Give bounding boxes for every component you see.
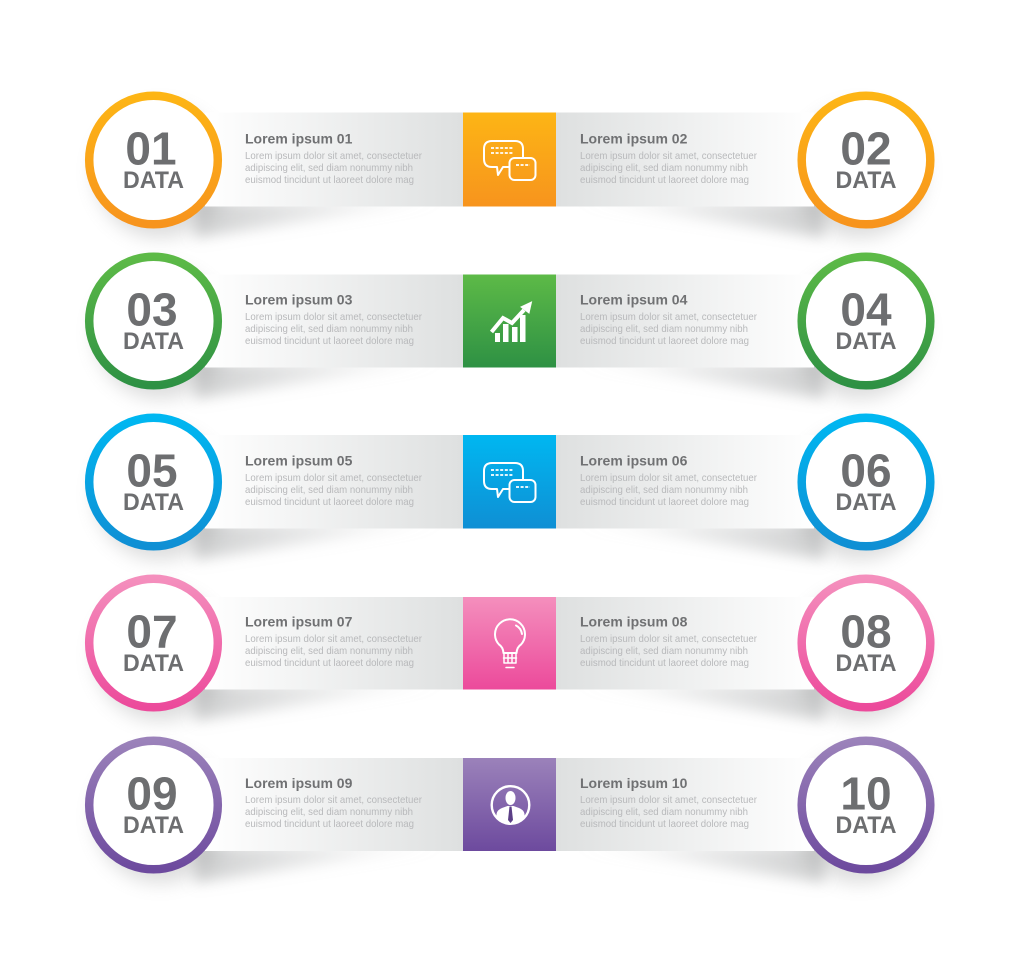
icon: businessman [492,786,529,824]
row 2 [89,257,930,399]
text: Lorem ipsum 08 [580,614,758,669]
text: Lorem ipsum 03 [245,292,423,347]
text: Lorem ipsum 04: adipiscing elit, sed diam nonummy nibh [580,324,748,335]
icon tile: businessman [463,758,556,851]
icon tile: chat [463,112,556,206]
icon tile: chat [463,435,556,528]
text: Lorem ipsum 01: Lorem ipsum 01 [245,130,353,146]
text: Lorem ipsum 08: Lorem ipsum dolor sit amet, consectetuer [580,634,758,645]
icon: chat bubbles [484,141,536,180]
badge 03: DATA [123,328,184,355]
shadows [94,428,925,560]
icon tile: light bulb [463,597,556,690]
badge 03: 03 [126,284,178,336]
shadows [94,106,925,238]
band: left [205,597,463,690]
badge 04: 04 [840,284,892,336]
row 1 [89,96,930,238]
band: left [205,112,463,206]
text: Lorem ipsum 04 [580,292,758,347]
text: Lorem ipsum 09: Lorem ipsum dolor sit amet, consectetuer [245,795,423,806]
badge 05 [89,418,218,546]
badge 01: DATA [123,167,184,194]
text: Lorem ipsum 02: Lorem ipsum 02 [580,130,688,146]
text: Lorem ipsum 05 [245,452,423,508]
band: right [556,758,814,851]
badge 07: DATA [123,650,184,677]
badge 10: 10 [840,768,892,820]
text: Lorem ipsum 08: adipiscing elit, sed diam nonummy nibh [580,646,748,657]
text: Lorem ipsum 02: euismod tincidunt ut laoreet dolore mag [580,175,749,186]
text: Lorem ipsum 07: adipiscing elit, sed diam nonummy nibh [245,646,413,657]
text: Lorem ipsum 04: euismod tincidunt ut laoreet dolore mag [580,336,749,347]
text: Lorem ipsum 05: adipiscing elit, sed diam nonummy nibh [245,485,413,496]
text: Lorem ipsum 06 [580,452,758,508]
text: Lorem ipsum 03: Lorem ipsum dolor sit amet, consectetuer [245,312,423,323]
badge 01 [89,96,218,224]
text: Lorem ipsum 10: Lorem ipsum dolor sit amet, consectetuer [580,795,758,806]
badge 07: 07 [126,606,178,658]
icon: light bulb [495,619,525,668]
shadows [94,267,925,399]
text: Lorem ipsum 03: adipiscing elit, sed diam nonummy nibh [245,324,413,335]
text: Lorem ipsum 09 [245,775,423,830]
shadows [94,751,925,883]
text: Lorem ipsum 06: euismod tincidunt ut laoreet dolore mag [580,497,749,508]
text: Lorem ipsum 09: Lorem ipsum 09 [245,775,353,791]
badge 08: 08 [840,606,892,658]
text: Lorem ipsum 01: euismod tincidunt ut laoreet dolore mag [245,175,414,186]
badge 10 [802,741,930,869]
text: Lorem ipsum 03: Lorem ipsum 03 [245,292,353,308]
icon: chat bubbles [484,463,536,502]
icon: growth chart [492,302,532,342]
text: Lorem ipsum 10: Lorem ipsum 10 [580,775,688,791]
badge 02: 02 [840,122,892,174]
text: Lorem ipsum 06: Lorem ipsum 06 [580,452,688,468]
badge 08: DATA [836,650,897,677]
badge 06: DATA [836,489,897,516]
badge 07 [89,579,218,707]
text: Lorem ipsum 03: euismod tincidunt ut laoreet dolore mag [245,336,414,347]
text: Lorem ipsum 10: adipiscing elit, sed diam nonummy nibh [580,807,748,818]
text: Lorem ipsum 07: Lorem ipsum dolor sit amet, consectetuer [245,634,423,645]
text: Lorem ipsum 02 [580,130,758,186]
badge 02: DATA [836,167,897,194]
icon tile: growth chart [463,274,556,368]
text: Lorem ipsum 05: euismod tincidunt ut laoreet dolore mag [245,497,414,508]
text: Lorem ipsum 10 [580,775,758,830]
text: Lorem ipsum 07: Lorem ipsum 07 [245,614,353,630]
text: Lorem ipsum 08: Lorem ipsum 08 [580,614,688,630]
band: right [556,274,814,368]
badge 01: 01 [125,122,177,174]
text: Lorem ipsum 09: adipiscing elit, sed diam nonummy nibh [245,807,413,818]
text: Lorem ipsum 07: euismod tincidunt ut laoreet dolore mag [245,658,414,669]
text: Lorem ipsum 05: Lorem ipsum 05 [245,452,353,468]
band: left [205,758,463,851]
band: right [556,597,814,690]
badge 05: 05 [126,444,178,496]
text: Lorem ipsum 08: euismod tincidunt ut laoreet dolore mag [580,658,749,669]
band: left [205,274,463,368]
row 4 [89,579,930,721]
badge 05: DATA [123,489,184,516]
badge 04: DATA [836,328,897,355]
text: Lorem ipsum 04: Lorem ipsum dolor sit amet, consectetuer [580,312,758,323]
text: Lorem ipsum 01: adipiscing elit, sed diam nonummy nibh [245,163,413,174]
text: Lorem ipsum 01 [245,130,423,186]
badge 08 [802,579,930,707]
text: Lorem ipsum 02: Lorem ipsum dolor sit amet, consectetuer [580,151,758,162]
text: Lorem ipsum 06: adipiscing elit, sed diam nonummy nibh [580,485,748,496]
text: Lorem ipsum 01: Lorem ipsum dolor sit amet, consectetuer [245,151,423,162]
badge 10: DATA [836,812,897,839]
badge 09 [89,741,218,869]
badge 02 [802,96,930,224]
band: right [556,112,814,206]
text: Lorem ipsum 05: Lorem ipsum dolor sit amet, consectetuer [245,473,423,484]
text: Lorem ipsum 04: Lorem ipsum 04 [580,292,688,308]
shadows [94,589,925,721]
text: Lorem ipsum 09: euismod tincidunt ut laoreet dolore mag [245,819,414,830]
badge 03 [89,257,218,385]
text: Lorem ipsum 07 [245,614,423,669]
text: Lorem ipsum 06: Lorem ipsum dolor sit amet, consectetuer [580,473,758,484]
badge 09: 09 [126,768,178,820]
row 3 [89,418,930,560]
text: Lorem ipsum 02: adipiscing elit, sed diam nonummy nibh [580,163,748,174]
badge 06: 06 [840,444,892,496]
row 5 [89,741,930,883]
badge 09: DATA [123,812,184,839]
band: left [205,435,463,528]
badge 06 [802,418,930,546]
badge 04 [802,257,930,385]
text: Lorem ipsum 10: euismod tincidunt ut laoreet dolore mag [580,819,749,830]
band: right [556,435,814,528]
